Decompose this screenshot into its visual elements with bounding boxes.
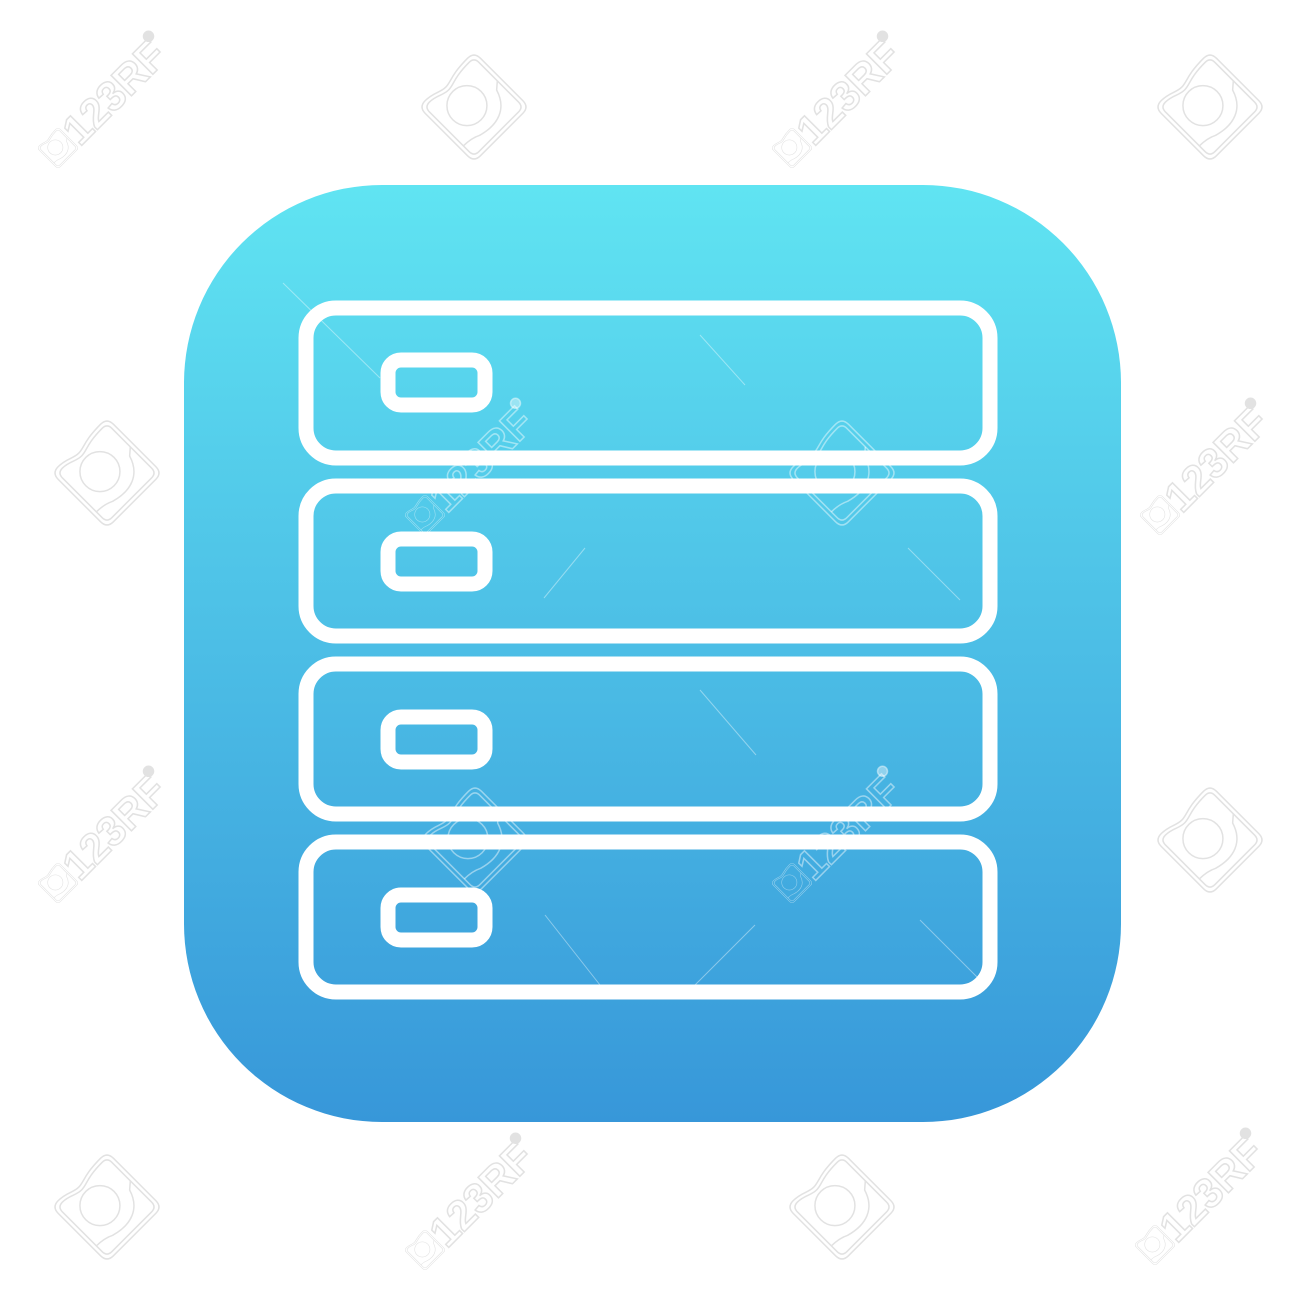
server unit 1 [306, 308, 990, 458]
watermark: faint diagonal hairlines on the icon [283, 283, 985, 985]
server unit 2 [306, 486, 990, 636]
server unit 3 [306, 664, 990, 814]
watermark stamp row 4 left: 123RF [420, 1133, 542, 1256]
large mark second row left [52, 418, 162, 528]
large mark third row right [1155, 785, 1265, 895]
watermark stamp row 3 left: 123RF [53, 766, 175, 889]
large mark top right [1155, 52, 1265, 162]
watermark stamp row 4 right [1128, 1124, 1277, 1272]
watermark stamp row 1 right [765, 27, 914, 175]
large mark bottom centre [787, 1152, 897, 1262]
large mark second row centre [787, 418, 897, 528]
watermark stamp row 2 right: 123RF [1155, 398, 1277, 521]
watermark stamp row 3 right: 123RF [787, 766, 909, 889]
large mark top centre [419, 52, 529, 162]
watermark stamp row 3 left [31, 762, 180, 910]
watermark stamp row 3 right [765, 762, 914, 910]
watermark stamp row 1 left [31, 27, 180, 175]
server unit 4 [306, 842, 990, 992]
watermark stamp row 4 right: 123RF [1150, 1128, 1272, 1251]
watermark stamp row 2 left: 123RF [420, 398, 542, 521]
watermark stamp row 4 left [398, 1129, 547, 1277]
watermark stamp row 2 right [1133, 394, 1282, 542]
icon background: rounded square [184, 185, 1121, 1122]
watermark stamp row 1 left: 123RF [53, 31, 175, 154]
watermark stamp row 2 left [398, 394, 547, 542]
watermark stamp row 1 right: 123RF [787, 31, 909, 154]
large mark bottom left [52, 1152, 162, 1262]
large mark third row centre [420, 785, 530, 895]
icon: server rack [306, 308, 990, 992]
